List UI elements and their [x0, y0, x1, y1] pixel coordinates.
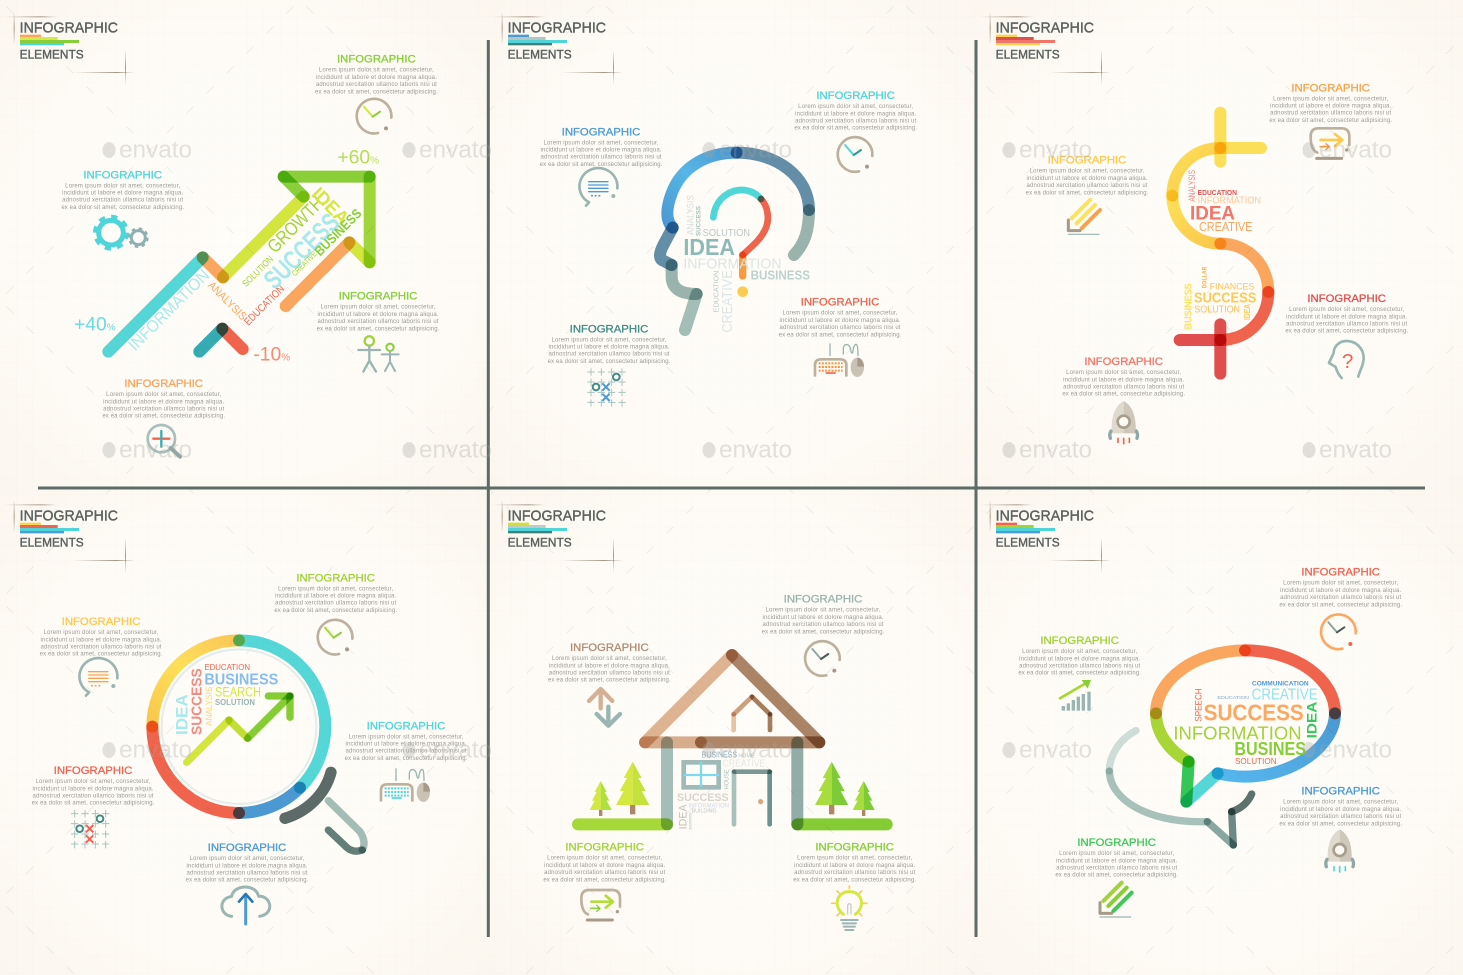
- text block: green left: ex ea dolor sit amet, consectetur adipisicing.: [543, 877, 666, 883]
- house word cloud: BUILDING: [692, 808, 717, 814]
- text block: red: Lorem ipsum dolor sit amet, consectetur,: [1283, 581, 1398, 587]
- text block: cyan: INFOGRAPHIC: [83, 169, 162, 181]
- heading: INFOGRAPHIC: [20, 508, 118, 524]
- text block: yellow: Lorem ipsum dolor sit amet, consectetur,: [43, 630, 159, 636]
- text block: green left: INFOGRAPHIC: [565, 842, 644, 854]
- heading: INFOGRAPHIC: [996, 508, 1094, 524]
- text block: yellow: INFOGRAPHIC: [62, 616, 140, 628]
- text block: green left: Lorem ipsum dolor sit amet, consectetur,: [547, 856, 662, 862]
- text block: green right: adnostrud xercitation ullamco laboris nisi ut: [794, 870, 915, 876]
- text block: brown: ex ea dolor sit amet, consectetur adipisicing.: [548, 678, 671, 684]
- envato watermarks: envato: [419, 736, 492, 764]
- text block: dark red: ex ea dolor sit amet, consectetur adipisicing.: [1285, 329, 1408, 335]
- text block: grey teal: [762, 594, 885, 635]
- text block: grey teal: incididunt ut labore et dolore magna aliqua.: [762, 615, 884, 621]
- dollar word cloud: ANALYSIS: [1187, 170, 1197, 202]
- text block: yellow: [40, 616, 163, 658]
- icon: pencil: [1100, 883, 1132, 917]
- icon: gears: [95, 217, 147, 249]
- text block: green: adnostrud xercitation ullamco laboris nisi ut: [275, 601, 396, 607]
- envato watermarks: envato: [719, 136, 792, 164]
- head outline: [660, 153, 809, 330]
- text block: green right: Lorem ipsum dolor sit amet, consectetur,: [797, 856, 912, 862]
- head word cloud: EDUCATION: [711, 271, 720, 312]
- icon: rocket: [1326, 829, 1354, 872]
- text block: green: INFOGRAPHIC: [1077, 837, 1156, 849]
- text block: salmon: [1062, 356, 1185, 398]
- text block: green: [274, 572, 397, 614]
- text block: green right: INFOGRAPHIC: [339, 291, 417, 303]
- bubble word cloud: SUCCESS: [1204, 700, 1304, 726]
- envato watermarks: envato: [1319, 436, 1392, 464]
- text block: blue: INFOGRAPHIC: [562, 126, 640, 138]
- dollar word cloud: FINANCES: [1210, 281, 1254, 291]
- text block: dark red: incididunt ut labore et dolore magna aliqua.: [1286, 314, 1407, 320]
- text block: red: adnostrud xercitation ullamco laboris nisi ut: [32, 793, 154, 799]
- panel: speech bubble: [981, 500, 1402, 917]
- house word cloud: CREATIVE: [723, 759, 766, 770]
- magnifier word cloud: SOLUTION: [215, 697, 255, 707]
- text block: red: incididunt ut labore et dolore magna aliqua.: [779, 318, 901, 324]
- text block: blue: Lorem ipsum dolor sit amet, consectetur,: [1283, 800, 1398, 806]
- text block: dark red: adnostrud xercitation ullamco laboris nisi ut: [1286, 321, 1407, 327]
- text block: teal: Lorem ipsum dolor sit amet, consectetur,: [551, 337, 667, 343]
- text block: green: [1055, 837, 1178, 879]
- heading: ELEMENTS: [508, 47, 572, 61]
- text block: orange: INFOGRAPHIC: [124, 378, 203, 390]
- text block: blue: incididunt ut labore et dolore magna aliqua.: [1280, 807, 1401, 813]
- panel: head: [493, 12, 917, 407]
- percent: -10: -10%: [253, 345, 290, 366]
- house word cloud: HOUSE: [724, 769, 731, 789]
- text block: grey teal: ex ea dolor sit amet, consectetur adipisicing.: [762, 629, 885, 635]
- dollar graphic: [1172, 113, 1268, 374]
- envato watermarks: envato: [119, 136, 192, 164]
- text block: light green: adnostrud xercitation ullamco laboris nisi ut: [1019, 663, 1140, 669]
- text block: blue: Lorem ipsum dolor sit amet, consectetur,: [189, 856, 305, 862]
- text block: cyan: Lorem ipsum dolor sit amet, consectetur,: [65, 183, 180, 189]
- text block: yellow: [1026, 155, 1149, 196]
- text block: cyan: INFOGRAPHIC: [816, 90, 895, 102]
- arrow word cloud: GROWTH: [263, 192, 328, 257]
- arrow word cloud: SUCCESS: [258, 207, 345, 295]
- envato watermarks: envato: [1019, 136, 1092, 164]
- text block: orange: INFOGRAPHIC: [1291, 82, 1370, 94]
- dollar word cloud: EDUCATION: [1198, 188, 1237, 197]
- text block: salmon: INFOGRAPHIC: [1084, 356, 1163, 368]
- text block: red: ex ea dolor sit amet, consectetur adipisicing.: [32, 801, 155, 807]
- arrow word cloud: CREATIVE: [290, 249, 319, 278]
- text block: green: adnostrud xercitation ullamco laboris nisi ut: [1056, 865, 1177, 871]
- text block: red: incididunt ut labore et dolore magna aliqua.: [1280, 588, 1401, 594]
- dollar word cloud: [1184, 170, 1261, 329]
- text block: green right: Lorem ipsum dolor sit amet, consectetur,: [320, 305, 436, 311]
- text block: blue: ex ea dolor sit amet, consectetur adipisicing.: [540, 162, 663, 168]
- text block: teal: INFOGRAPHIC: [570, 323, 648, 335]
- text block: cyan: INFOGRAPHIC: [367, 720, 445, 732]
- magnifier handle: [285, 772, 364, 851]
- front bubble: [1156, 650, 1335, 802]
- house word cloud: SUCCESS: [677, 792, 729, 804]
- text block: green right: incididunt ut labore et dolore magna aliqua.: [317, 312, 439, 318]
- panel: arrow: [5, 12, 440, 457]
- magnifier word cloud: SEARCH: [215, 684, 261, 700]
- arrow graphic: [108, 177, 370, 352]
- text block: red: INFOGRAPHIC: [1301, 567, 1380, 579]
- text block: red: INFOGRAPHIC: [801, 297, 879, 309]
- text block: green: ex ea dolor sit amet, consectetur adipisicing.: [274, 608, 397, 614]
- text block: green top: INFOGRAPHIC: [337, 54, 416, 66]
- icon: pencil: [1068, 200, 1100, 234]
- text block: cyan: incididunt ut labore et dolore magna aliqua.: [345, 742, 467, 748]
- back bubble: [1109, 731, 1252, 845]
- text block: blue: INFOGRAPHIC: [1301, 786, 1380, 798]
- text block: green: incididunt ut labore et dolore magna aliqua.: [1056, 858, 1177, 864]
- magnifier ring: [152, 640, 325, 813]
- text block: cyan: [345, 720, 468, 762]
- house word cloud: EDUCATION: [689, 812, 693, 829]
- icon: head with question: [1329, 341, 1364, 378]
- text block: green top: adnostrud xercitation ullamco laboris nisi ut: [316, 82, 437, 88]
- bubble word cloud: SPEECH: [1194, 688, 1204, 722]
- icon: head with question: ?: [1342, 350, 1353, 373]
- envato watermarks: envato: [119, 736, 192, 764]
- text block: cyan: ex ea dolor sit amet, consectetur adipisicing.: [61, 205, 184, 211]
- icon: keyboard and mouse: [381, 768, 430, 802]
- icon: tic tac toe: [71, 810, 109, 848]
- text block: cyan: [794, 90, 917, 132]
- text block: cyan: adnostrud xercitation ullamco laboris nisi ut: [62, 198, 183, 204]
- head word cloud: [683, 195, 810, 333]
- icon: clock: [357, 99, 391, 133]
- bubble word cloud: SOLUTION: [1235, 756, 1277, 766]
- text block: teal: adnostrud xercitation ullamco laboris nisi ut: [548, 352, 670, 358]
- text block: grey teal: adnostrud xercitation ullamco laboris nisi ut: [762, 622, 884, 628]
- text block: light green: incididunt ut labore et dolore magna aliqua.: [1019, 656, 1140, 662]
- dollar word cloud: DOLLAR: [1203, 266, 1209, 288]
- heading: [5, 12, 135, 85]
- envato watermarks: envato: [1319, 736, 1392, 764]
- text block: salmon: adnostrud xercitation ullamco laboris nisi ut: [1063, 384, 1184, 390]
- text block: green top: ex ea dolor sit amet, consectetur adipisicing.: [315, 89, 438, 95]
- head word cloud: ANALYSIS: [685, 195, 695, 235]
- bubble word cloud: BUSINES: [1234, 738, 1306, 759]
- text block: blue: adnostrud xercitation ullamco laboris nisi ut: [1280, 814, 1401, 820]
- bubble word cloud: INFORMATION: [1173, 722, 1302, 743]
- text block: orange: [102, 378, 225, 420]
- icon: keyboard and mouse: [815, 343, 864, 377]
- arrow word cloud: ANALYSIS: [205, 280, 249, 323]
- icon: light bulb: [832, 886, 867, 930]
- text block: yellow: incididunt ut labore et dolore magna aliqua.: [40, 637, 162, 643]
- text block: green right: ex ea dolor sit amet, consectetur adipisicing.: [793, 877, 916, 883]
- text block: cyan: ex ea dolor sit amet, consectetur adipisicing.: [345, 756, 468, 762]
- bubble word cloud: [1173, 682, 1319, 766]
- text block: grey teal: INFOGRAPHIC: [784, 594, 862, 606]
- dollar word cloud: SOLUTION: [1194, 305, 1240, 316]
- arrow word cloud: EDUCATION: [242, 283, 287, 328]
- text block: blue: incididunt ut labore et dolore magna aliqua.: [540, 148, 662, 154]
- text block: blue: adnostrud xercitation ullamco laboris nisi ut: [540, 155, 662, 161]
- text block: red: [32, 765, 155, 807]
- head word cloud: INFORMATION: [683, 256, 782, 272]
- text block: light green: INFOGRAPHIC: [1040, 635, 1119, 647]
- icon: speech bubble: [79, 658, 117, 696]
- icon: clock: [838, 137, 872, 172]
- icon: rocket: [1110, 401, 1138, 444]
- arrow word cloud: SOLUTION: [240, 254, 275, 289]
- text block: cyan: incididunt ut labore et dolore magna aliqua.: [795, 111, 916, 117]
- text block: blue: [540, 126, 663, 168]
- text block: salmon: incididunt ut labore et dolore magna aliqua.: [1063, 377, 1184, 383]
- dollar word cloud: BUSINESS: [1184, 283, 1195, 329]
- envato watermarks: envato: [719, 436, 792, 464]
- text block: orange: adnostrud xercitation ullamco laboris nisi ut: [103, 406, 224, 412]
- text block: yellow: adnostrud xercitation ullamco laboris nisi ut: [1026, 183, 1148, 189]
- text block: green right: [317, 291, 440, 332]
- text block: green right: adnostrud xercitation ullamco laboris nisi ut: [317, 319, 439, 325]
- arrow word cloud: BUSINESS: [312, 206, 365, 259]
- heading: [493, 12, 623, 85]
- text block: blue: [186, 842, 309, 884]
- text block: red: Lorem ipsum dolor sit amet, consectetur,: [35, 779, 151, 785]
- head word cloud: CREATIVE: [720, 270, 736, 333]
- panel: dollar sign: [981, 12, 1408, 444]
- text block: cyan: Lorem ipsum dolor sit amet, consectetur,: [348, 734, 464, 740]
- heading: ELEMENTS: [20, 47, 84, 61]
- text block: yellow: ex ea dolor sit amet, consectetur adipisicing.: [40, 652, 163, 658]
- text block: orange: [1269, 82, 1392, 124]
- envato watermarks: envato: [419, 136, 492, 164]
- text block: green right: INFOGRAPHIC: [815, 842, 894, 854]
- icon: magnifier: [148, 425, 180, 457]
- text block: teal: ex ea dolor sit amet, consectetur adipisicing.: [548, 359, 671, 365]
- text block: green: Lorem ipsum dolor sit amet, consectetur,: [278, 586, 393, 592]
- text block: blue: ex ea dolor sit amet, consectetur adipisicing.: [186, 878, 309, 884]
- text block: green right: incididunt ut labore et dolore magna aliqua.: [794, 863, 915, 869]
- icon: up and down arrows: [589, 689, 620, 726]
- heading: [981, 500, 1111, 573]
- text block: grey teal: Lorem ipsum dolor sit amet, consectetur,: [765, 608, 881, 614]
- text block: green: ex ea dolor sit amet, consectetur adipisicing.: [1055, 873, 1178, 879]
- text block: brown: incididunt ut labore et dolore magna aliqua.: [549, 663, 670, 669]
- heading: [981, 12, 1111, 85]
- minus arrow: [199, 329, 243, 352]
- heading: INFOGRAPHIC: [508, 508, 606, 524]
- percent: +60: +60%: [337, 147, 379, 168]
- text block: cyan: [61, 169, 184, 211]
- text block: red: [1279, 567, 1402, 608]
- icon: monitor: [581, 890, 620, 920]
- dollar word cloud: IDEA: [1190, 203, 1235, 224]
- house word cloud: IDEA: [678, 804, 690, 829]
- heading: [5, 500, 135, 573]
- text block: dark red: [1285, 293, 1408, 335]
- house graphic: [578, 655, 887, 824]
- envato watermarks: envato: [119, 436, 192, 464]
- text block: red: ex ea dolor sit amet, consectetur adipisicing.: [1279, 602, 1402, 608]
- text block: green right: [793, 842, 916, 883]
- head word cloud: SUCCESS: [696, 205, 703, 236]
- text block: blue: [1279, 786, 1402, 827]
- icon: cloud upload: [222, 887, 270, 924]
- arrow word cloud: IDEA: [308, 183, 353, 228]
- arrow word cloud: [124, 183, 365, 354]
- bubble word cloud: EDUCATION: [1217, 695, 1249, 701]
- text block: blue: incididunt ut labore et dolore magna aliqua.: [186, 863, 308, 869]
- text block: orange: Lorem ipsum dolor sit amet, consectetur,: [1273, 96, 1388, 102]
- magnifier word cloud: EDUCATION: [204, 662, 250, 672]
- heading: INFOGRAPHIC: [996, 20, 1094, 36]
- text block: green: Lorem ipsum dolor sit amet, consectetur,: [1059, 851, 1174, 857]
- text block: brown: Lorem ipsum dolor sit amet, consectetur,: [552, 656, 667, 662]
- dollar word cloud: IDEA: [1243, 304, 1252, 320]
- text block: dark red: INFOGRAPHIC: [1307, 293, 1386, 305]
- text block: green top: Lorem ipsum dolor sit amet, consectetur,: [319, 68, 434, 74]
- text block: brown: INFOGRAPHIC: [570, 642, 649, 654]
- text block: green left: incididunt ut labore et dolore magna aliqua.: [544, 863, 665, 869]
- house word cloud: INFORMATION: [688, 802, 729, 809]
- bubble word cloud: COMMUNICATION: [1252, 682, 1309, 688]
- heading: ELEMENTS: [996, 47, 1060, 61]
- text block: yellow: INFOGRAPHIC: [1048, 155, 1126, 167]
- head word cloud: BUSINESS: [751, 268, 810, 282]
- envato watermarks: [102, 136, 1392, 764]
- text block: teal: [548, 323, 671, 365]
- text block: teal: incididunt ut labore et dolore magna aliqua.: [548, 345, 670, 351]
- text block: green left: [543, 842, 666, 883]
- percent: +40: +40%: [74, 314, 116, 335]
- heading: INFOGRAPHIC: [20, 20, 118, 36]
- text block: red: ex ea dolor sit amet, consectetur adipisicing.: [779, 332, 902, 338]
- text block: yellow: incididunt ut labore et dolore magna aliqua.: [1026, 176, 1148, 182]
- house word cloud: BUSINESS: [702, 751, 737, 760]
- text block: light green: [1018, 635, 1141, 677]
- house word cloud: HOME: [738, 754, 755, 760]
- icon: people: [358, 336, 399, 372]
- bubble word cloud: IDEA: [1303, 702, 1319, 738]
- icon: tic tac toe: [587, 368, 626, 407]
- icon: monitor: [1311, 128, 1349, 158]
- panel: magnifier: [5, 500, 468, 924]
- text block: blue: ex ea dolor sit amet, consectetur adipisicing.: [1279, 821, 1402, 827]
- text block: red: Lorem ipsum dolor sit amet, consectetur,: [782, 311, 898, 317]
- heading: INFOGRAPHIC: [508, 20, 606, 36]
- text block: orange: ex ea dolor sit amet, consectetur adipisicing.: [1269, 118, 1392, 124]
- text block: red: [779, 297, 902, 338]
- magnifier word cloud: [172, 662, 279, 735]
- text block: red: incididunt ut labore et dolore magna aliqua.: [32, 786, 154, 792]
- text block: yellow: ex ea dolor sit amet, consectetur adipisicing.: [1026, 190, 1149, 196]
- text block: salmon: Lorem ipsum dolor sit amet, consectetur,: [1066, 370, 1181, 376]
- envato watermarks: envato: [1319, 136, 1392, 164]
- magnifier word cloud: IDEA: [172, 694, 191, 735]
- dollar word cloud: CREATIVE: [1199, 220, 1252, 234]
- icon: speech bubble: [579, 168, 617, 206]
- text block: orange: adnostrud xercitation ullamco laboris nisi ut: [1270, 111, 1391, 117]
- heading: ELEMENTS: [20, 535, 84, 549]
- text block: blue: INFOGRAPHIC: [208, 842, 286, 854]
- heading: ELEMENTS: [508, 535, 572, 549]
- text block: brown: [548, 642, 671, 684]
- head word cloud: IDEA: [683, 234, 735, 260]
- text block: cyan: ex ea dolor sit amet, consectetur adipisicing.: [794, 126, 917, 132]
- magnifier word cloud: BUSINESS: [204, 671, 279, 688]
- growth arrow: [187, 696, 290, 762]
- head word cloud: SOLUTION: [703, 228, 750, 239]
- house word cloud: [677, 751, 766, 829]
- text block: blue: adnostrud xercitation ullamco laboris nisi ut: [186, 870, 308, 876]
- magnifier word cloud: SUCCESS: [190, 668, 206, 735]
- panel: house: [493, 500, 916, 930]
- trees: [590, 762, 875, 816]
- text block: cyan: Lorem ipsum dolor sit amet, consectetur,: [798, 104, 913, 110]
- text block: green right: ex ea dolor sit amet, consectetur adipisicing.: [317, 326, 440, 332]
- text block: green: INFOGRAPHIC: [296, 572, 375, 584]
- envato watermarks: envato: [1019, 736, 1092, 764]
- magnifier word cloud: ANALYSIS: [204, 687, 214, 726]
- icon: clock: [318, 620, 352, 654]
- text block: cyan: adnostrud xercitation ullamco laboris nisi ut: [795, 118, 916, 124]
- text block: red: INFOGRAPHIC: [54, 765, 132, 777]
- window: [683, 762, 719, 788]
- text block: orange: Lorem ipsum dolor sit amet, consectetur,: [106, 392, 221, 398]
- icon: clock: [805, 641, 840, 676]
- bubble word cloud: CREATIVE: [1252, 686, 1318, 703]
- arrow word cloud: INFORMATION: [124, 266, 213, 354]
- text block: green top: [315, 54, 438, 95]
- envato watermarks: envato: [419, 436, 492, 464]
- text block: red: adnostrud xercitation ullamco laboris nisi ut: [1280, 595, 1401, 601]
- text block: green left: adnostrud xercitation ullamco laboris nisi ut: [544, 870, 665, 876]
- text block: orange: ex ea dolor sit amet, consectetur adipisicing.: [102, 414, 225, 420]
- dollar word cloud: INFORMATION: [1198, 195, 1261, 206]
- question mark: [713, 190, 768, 297]
- envato watermarks: envato: [719, 736, 792, 764]
- text block: green top: incididunt ut labore et dolore magna aliqua.: [316, 75, 437, 81]
- text block: yellow: adnostrud xercitation ullamco laboris nisi ut: [40, 644, 162, 650]
- heading: ELEMENTS: [996, 535, 1060, 549]
- text block: light green: Lorem ipsum dolor sit amet, consectetur,: [1022, 649, 1137, 655]
- text block: blue: Lorem ipsum dolor sit amet, consectetur,: [543, 140, 659, 146]
- heading: [493, 500, 623, 573]
- text block: cyan: incididunt ut labore et dolore magna aliqua.: [62, 191, 183, 197]
- text block: green: incididunt ut labore et dolore magna aliqua.: [275, 594, 396, 600]
- dollar word cloud: SUCCESS: [1194, 291, 1256, 307]
- text block: light green: ex ea dolor sit amet, consectetur adipisicing.: [1018, 671, 1141, 677]
- text block: salmon: ex ea dolor sit amet, consectetur adipisicing.: [1062, 392, 1185, 398]
- icon: bar chart: [1060, 680, 1091, 711]
- text block: orange: incididunt ut labore et dolore magna aliqua.: [103, 399, 224, 405]
- text block: cyan: adnostrud xercitation ullamco laboris nisi ut: [345, 749, 467, 755]
- text block: brown: adnostrud xercitation ullamco laboris nisi ut: [549, 670, 670, 676]
- text block: dark red: Lorem ipsum dolor sit amet, consectetur,: [1289, 307, 1404, 313]
- text block: red: adnostrud xercitation ullamco laboris nisi ut: [779, 325, 901, 331]
- icon: clock: [1321, 614, 1356, 649]
- envato watermarks: envato: [1019, 436, 1092, 464]
- text block: yellow: Lorem ipsum dolor sit amet, consectetur,: [1029, 169, 1145, 175]
- text block: orange: incididunt ut labore et dolore magna aliqua.: [1270, 104, 1391, 110]
